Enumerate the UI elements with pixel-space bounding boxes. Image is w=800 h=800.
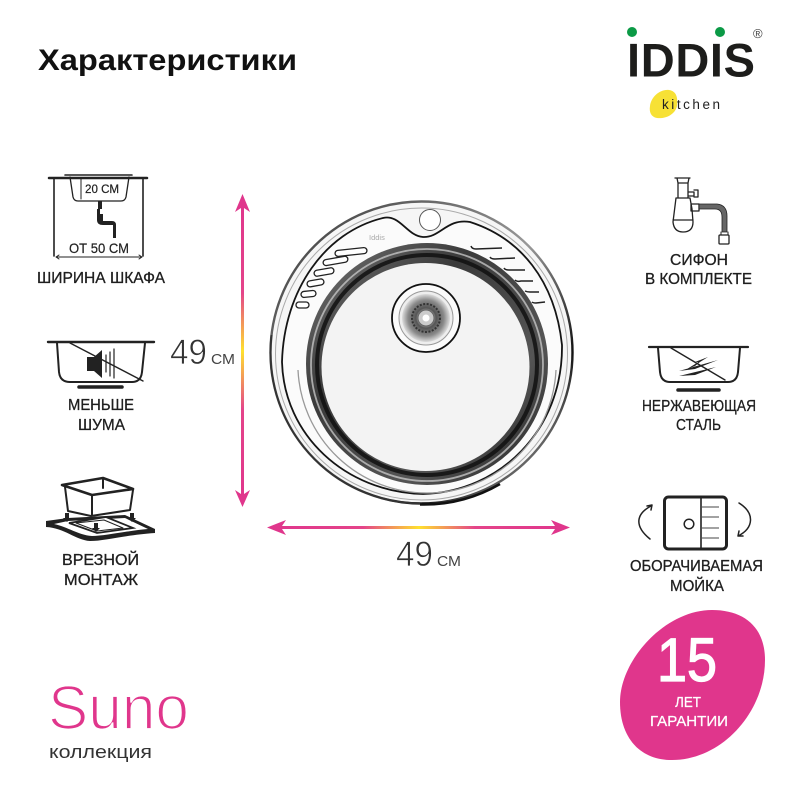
collection caption: коллекция: [49, 742, 152, 762]
label: stainless steel: СТАЛЬ: [676, 417, 721, 434]
icon: drop-in mount: [46, 478, 155, 541]
bowl: [306, 243, 548, 485]
label: siphon included: [645, 252, 752, 288]
width dimension label: 49: [396, 535, 433, 574]
label: stainless steel: [642, 398, 756, 434]
width dimension label: [396, 535, 461, 574]
label: reversible sink: МОЙКА: [670, 577, 725, 595]
label: less noise: ШУМА: [78, 417, 126, 434]
logo: IDDIS kitchen: kitchen: [662, 97, 720, 112]
collection name: Suno: [48, 674, 189, 743]
icon: cabinet width: ОТ 50 СМ: [69, 240, 129, 256]
height dimension label: 49: [170, 333, 207, 372]
label: less noise: [68, 397, 134, 434]
warranty badge: 15: [657, 626, 717, 694]
icon: less noise: [48, 342, 154, 387]
warranty badge: ЛЕТ: [675, 695, 701, 711]
sink: [270, 202, 572, 505]
icon: reversible sink: [639, 497, 751, 549]
vertical dimension arrow: [235, 194, 250, 507]
icon: stainless steel: [649, 347, 748, 390]
height dimension label: [170, 333, 235, 372]
logo: IDDIS kitchen: ®: [753, 26, 763, 41]
label: drop-in mount: МОНТАЖ: [64, 572, 139, 589]
title: Характеристики: [38, 44, 297, 77]
label: cabinet width: ШИРИНА ШКАФА: [37, 270, 166, 287]
width dimension label: СМ: [437, 553, 461, 570]
mounting hole: [420, 210, 440, 230]
label: siphon included: В КОМПЛЕКТЕ: [645, 271, 752, 288]
label: stainless steel: НЕРЖАВЕЮЩАЯ: [642, 398, 756, 415]
horizontal dimension arrow: [267, 520, 570, 535]
label: reversible sink: ОБОРАЧИВАЕМАЯ: [630, 558, 763, 575]
logo: IDDIS kitchen: [627, 26, 763, 118]
drain: [392, 284, 460, 352]
label: drop-in mount: ВРЕЗНОЙ: [62, 551, 139, 569]
warranty badge: [620, 610, 765, 760]
icon: cabinet width: [49, 175, 147, 259]
logo: IDDIS kitchen: IDDIS: [627, 34, 755, 86]
drainboard slots left: [296, 247, 367, 308]
icon: siphon: [673, 178, 729, 244]
height dimension label: СМ: [211, 351, 235, 368]
brand mark: Iddis: [369, 233, 385, 242]
warranty badge: ГАРАНТИИ: [650, 714, 728, 730]
label: less noise: МЕНЬШЕ: [68, 397, 134, 414]
tray contour with notch: [282, 218, 562, 494]
sink outer rim: [270, 202, 572, 504]
label: reversible sink: [630, 558, 763, 595]
drainboard slots right: [471, 246, 545, 303]
icon: cabinet width: 20 СМ: [85, 184, 119, 196]
label: drop-in mount: [62, 551, 139, 589]
label: siphon included: СИФОН: [670, 252, 728, 269]
